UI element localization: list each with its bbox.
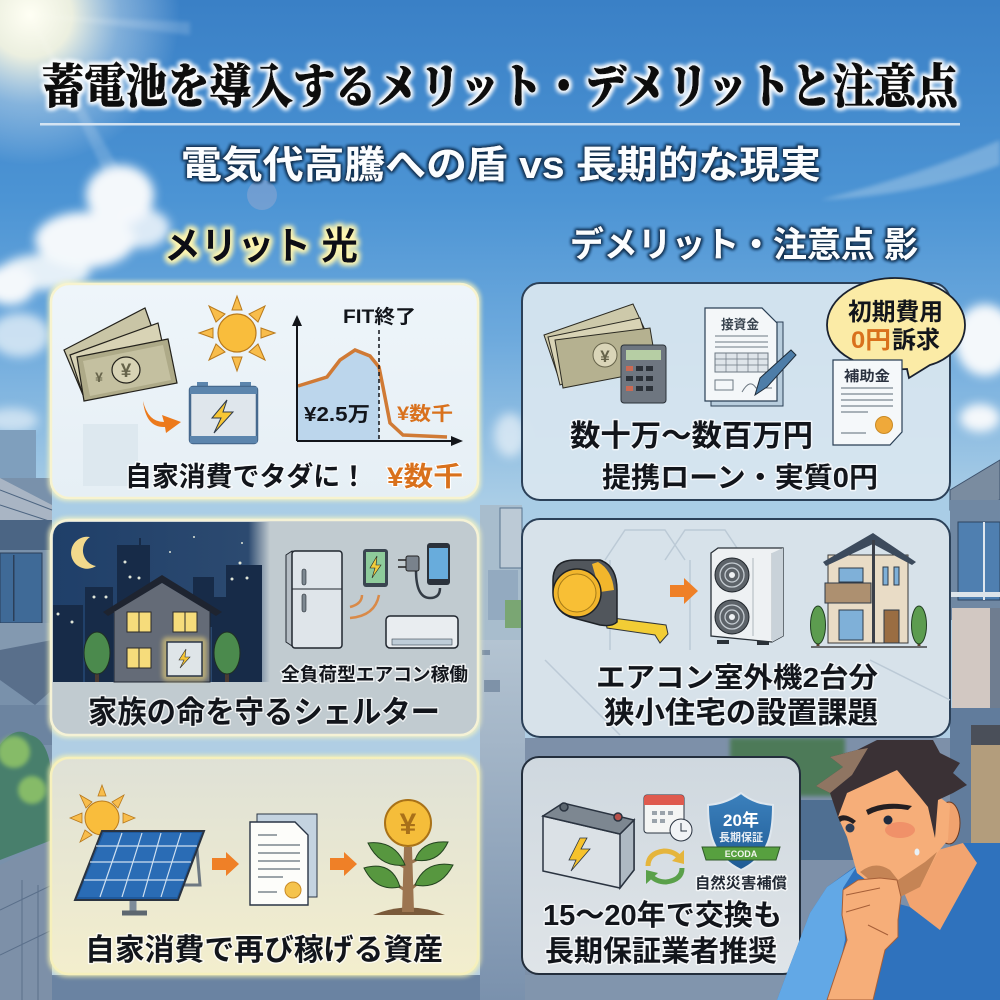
icon: loan contract and pen: 接資金 bbox=[721, 317, 759, 332]
icon: narrow house bbox=[810, 533, 927, 647]
icon: refrigerator bbox=[286, 551, 342, 648]
icon: storage battery bbox=[543, 803, 634, 888]
icon: documents bbox=[250, 814, 317, 905]
icon: power arrows bbox=[350, 595, 379, 618]
panel: merit 1 savings bbox=[48, 281, 481, 501]
caption: demerit 1: 数十万〜数百万円 bbox=[570, 420, 813, 453]
caption: demerit 2 bbox=[596, 662, 878, 730]
icon: banknotes and calculator bbox=[544, 304, 666, 403]
caption: merit 2: 家族の命を守るシェルター bbox=[88, 695, 440, 730]
shirt bbox=[777, 843, 1000, 1000]
ear bbox=[938, 802, 960, 844]
icon: warranty shield: 20年 bbox=[723, 810, 759, 830]
road bbox=[480, 640, 525, 1000]
caption: merit 1: ¥数千 bbox=[387, 462, 463, 492]
left house bbox=[0, 478, 52, 1000]
trees bbox=[84, 632, 240, 682]
icon: orange arrow bbox=[143, 401, 181, 433]
heading: merit: メリット 光 bbox=[164, 226, 358, 268]
caption: demerit 3: 長期保証業者推奨 bbox=[545, 935, 777, 968]
caption: merit 3: 自家消費で再び稼げる資産 bbox=[85, 934, 443, 967]
head and face bbox=[838, 770, 950, 897]
caption: merit 1 bbox=[125, 461, 463, 492]
callout: zero upfront cost: 訴求 bbox=[892, 327, 940, 354]
icon: solar panel bbox=[75, 831, 204, 913]
night scene bbox=[53, 522, 270, 682]
subtitle: 電気代高騰への盾 vs 長期的な現実 bbox=[181, 145, 821, 187]
caption: merit 1: 自家消費でタダに！ bbox=[125, 461, 367, 492]
callout: zero upfront cost bbox=[827, 278, 965, 378]
heading: demerit: デメリット・注意点 影 bbox=[570, 225, 918, 265]
stubble bbox=[860, 852, 937, 897]
icon: replace cycle bbox=[646, 850, 684, 884]
right house bbox=[950, 460, 1000, 850]
caption: air conditioner: 全負荷型エアコン稼働 bbox=[281, 664, 468, 685]
icon: subsidy document bbox=[833, 360, 902, 445]
caption: disaster cover: 自然災害補償 bbox=[695, 874, 787, 892]
icon: outdoor unit bbox=[711, 548, 783, 645]
eyes and brows bbox=[838, 804, 912, 832]
neck bbox=[905, 843, 977, 930]
panel: merit 3 asset bbox=[48, 755, 481, 977]
callout: zero upfront cost: 初期費用 bbox=[848, 299, 943, 326]
icon: coin plant: ¥ bbox=[400, 808, 417, 841]
icon: coin plant bbox=[364, 800, 453, 915]
icon: calendar and clock bbox=[644, 795, 692, 841]
panel: merit 2 shelter bbox=[48, 517, 481, 738]
caption: demerit 1 bbox=[570, 420, 878, 493]
caption: demerit 3 bbox=[543, 899, 782, 968]
icon: warranty shield bbox=[702, 793, 780, 870]
centre lower scene bbox=[525, 738, 950, 1000]
house bbox=[103, 575, 222, 682]
icon: battery bbox=[190, 382, 257, 443]
icon: sun bbox=[199, 296, 275, 371]
caption: demerit 1: 提携ローン・実質0円 bbox=[602, 462, 878, 493]
icon: subsidy document: 補助金 bbox=[844, 368, 890, 384]
caption: demerit 2: 狭小住宅の設置課題 bbox=[604, 697, 878, 730]
icon: air conditioner bbox=[386, 616, 458, 648]
icon: banknotes: ¥ bbox=[95, 369, 103, 385]
icon: arrow bbox=[670, 578, 698, 604]
icon: banknotes: ¥ bbox=[121, 361, 132, 382]
character: worried man bbox=[777, 740, 1000, 1000]
icon: banknotes bbox=[64, 308, 177, 401]
panel: demerit 3 lifespan bbox=[522, 757, 800, 974]
chart: electricity value after FIT: ¥2.5万 bbox=[304, 404, 370, 426]
hand and arm bbox=[827, 878, 901, 1000]
blush bbox=[885, 822, 915, 838]
panel: demerit 1 cost bbox=[522, 278, 965, 500]
icon: warranty shield: ECODA bbox=[725, 849, 758, 859]
icon: banknotes and calculator: ¥ bbox=[600, 347, 610, 366]
caption: demerit 2: エアコン室外機2台分 bbox=[596, 662, 878, 693]
chart: electricity value after FIT: ¥数千 bbox=[397, 403, 453, 425]
sweat drop bbox=[914, 848, 920, 856]
chart: electricity value after FIT: FIT終了 bbox=[343, 306, 416, 328]
icon: tape measure bbox=[553, 560, 668, 643]
far buildings bbox=[0, 430, 522, 640]
icon: portable battery bbox=[363, 549, 388, 587]
icon: sun bbox=[70, 785, 135, 842]
callout: zero upfront cost: 0円 bbox=[851, 327, 891, 354]
moon bbox=[71, 537, 96, 569]
icon: charger and phone bbox=[398, 543, 450, 598]
caption: demerit 3: 15〜20年で交換も bbox=[543, 899, 782, 932]
icon: arrow bbox=[212, 852, 239, 876]
icon: warranty shield: 長期保証 bbox=[719, 830, 763, 844]
panel: demerit 2 space bbox=[522, 519, 950, 737]
icon: loan contract and pen bbox=[705, 308, 796, 406]
icon: arrow bbox=[330, 852, 357, 876]
chart: electricity value after FIT bbox=[292, 306, 463, 446]
hair bbox=[816, 740, 967, 838]
